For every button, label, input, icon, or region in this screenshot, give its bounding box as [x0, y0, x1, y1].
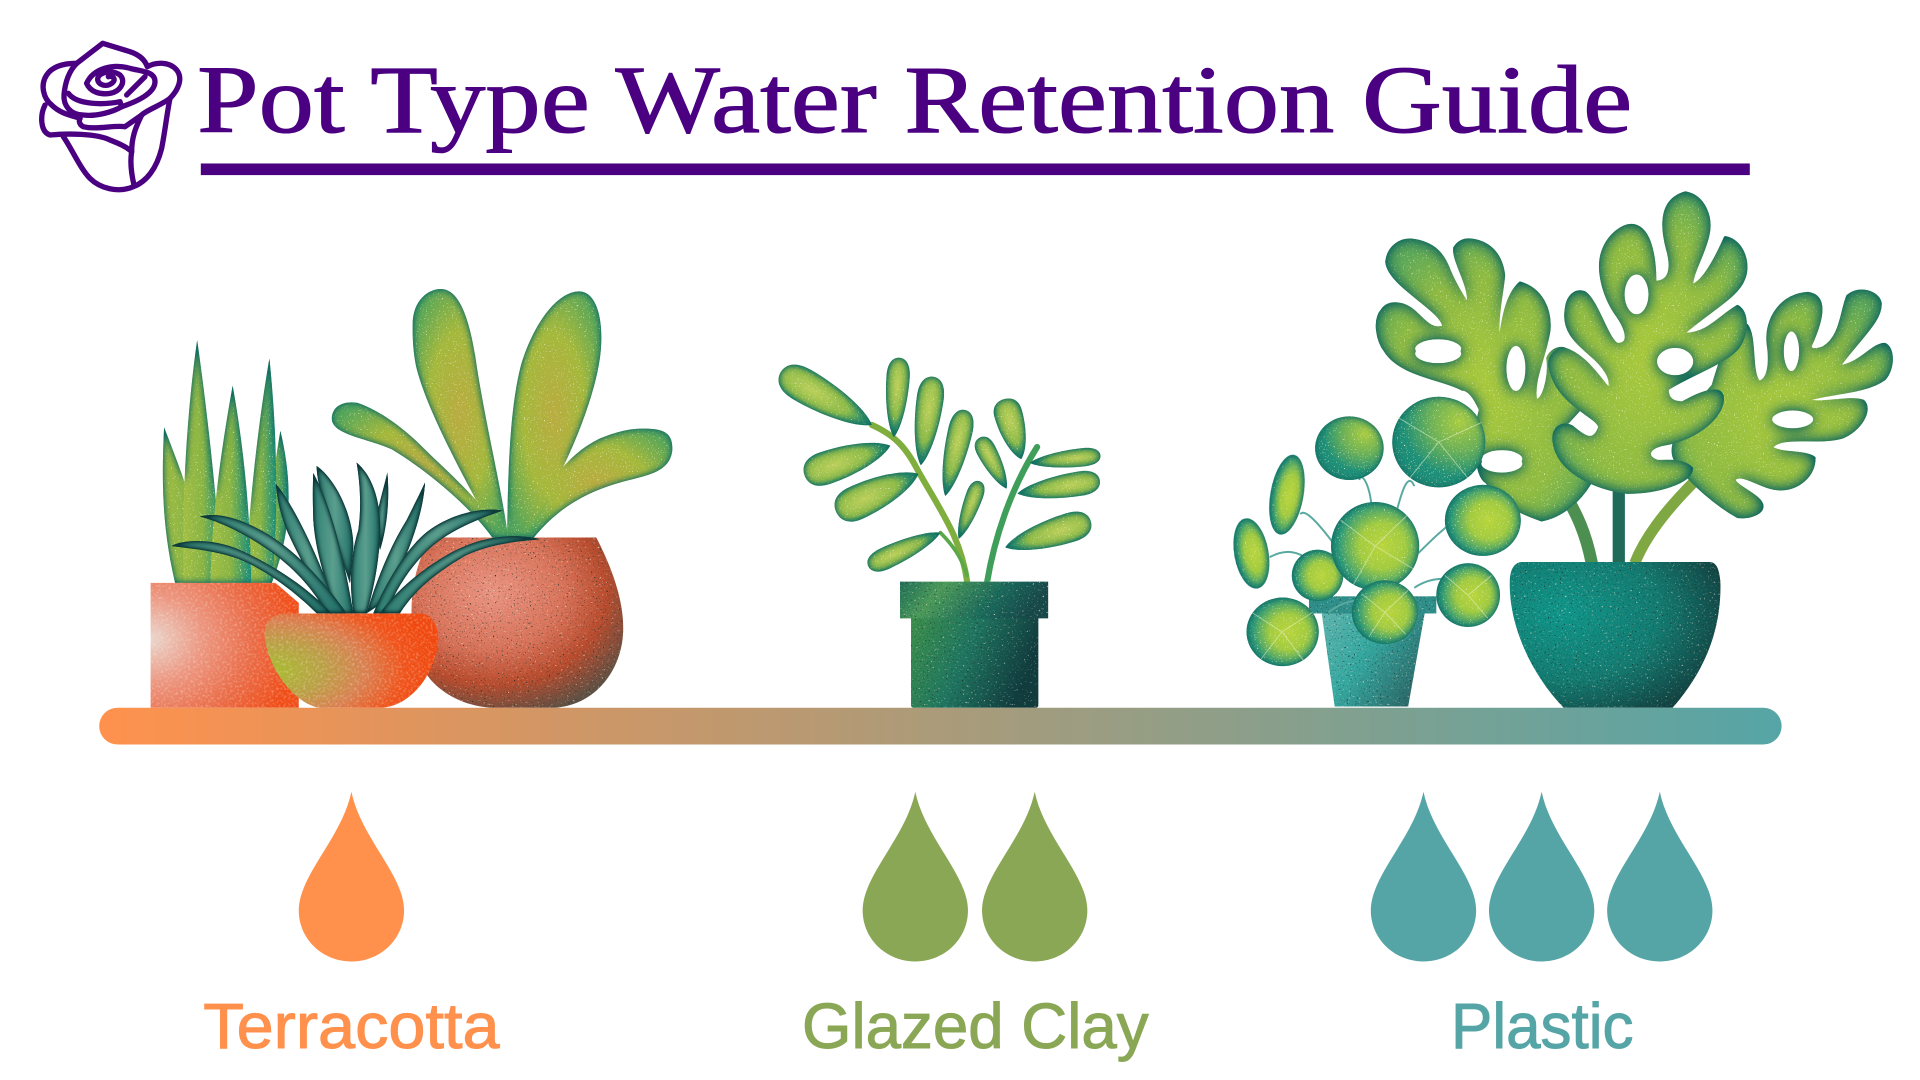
plant group: glazed clay	[772, 357, 1102, 708]
small aqua pot	[1309, 596, 1436, 707]
water drops: plastic	[1371, 792, 1712, 961]
broad-leaf plant	[332, 289, 672, 538]
plant group: plastic	[1228, 193, 1891, 708]
aloe plant	[172, 463, 540, 613]
plant group: terracotta	[151, 289, 672, 708]
monstera stems	[1562, 480, 1696, 563]
shelf gradient bar	[99, 708, 1782, 744]
label: terracotta: Terracotta	[203, 991, 500, 1062]
label: plastic: Plastic	[1451, 991, 1633, 1062]
pilea stems	[1270, 477, 1467, 612]
pilea leaves	[1228, 397, 1521, 666]
water drops: glazed clay	[863, 792, 1087, 961]
water drops: terracotta	[299, 792, 404, 961]
small terracotta pot	[264, 613, 438, 708]
square terracotta pot	[151, 583, 299, 708]
round terracotta pot	[412, 538, 623, 708]
label: glazed clay: Glazed Clay	[802, 991, 1149, 1062]
stems	[872, 425, 1037, 583]
monstera leaf middle	[1550, 193, 1746, 492]
title underline	[201, 163, 1750, 175]
monstera leaf left	[1377, 240, 1591, 520]
snake plant	[163, 340, 289, 583]
title: Pot Type Water Retention Guide	[197, 46, 1632, 153]
monstera leaf right	[1673, 291, 1891, 517]
zz plant leaves	[772, 357, 1102, 576]
icon: rose logo	[42, 43, 180, 190]
large teal pot	[1510, 562, 1720, 708]
glazed clay pot	[900, 582, 1048, 708]
